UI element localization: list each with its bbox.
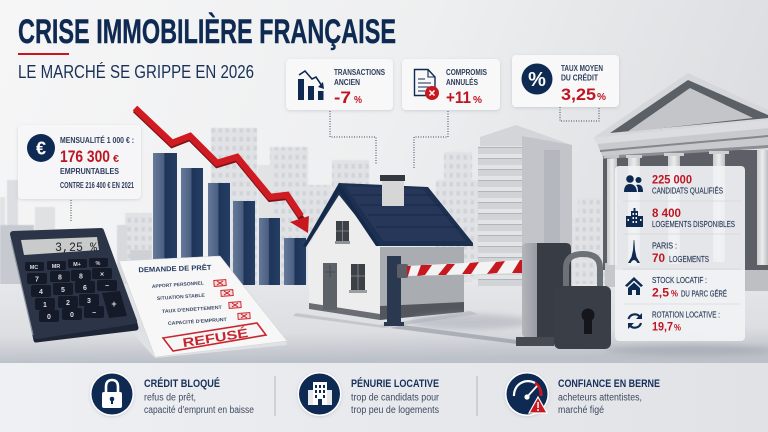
takeaway: confidence [505,372,660,416]
checklist rows [152,280,227,327]
icon: euro: € [36,138,46,158]
panel: transactions: % [354,94,363,106]
stat: available housing [626,208,735,229]
icon: percent: % [528,69,546,91]
rejected checkboxes [214,280,250,319]
panel: transactions: ANCIEN [334,78,360,87]
stat: candidates: CANDIDATS QUALIFIÉS [652,186,723,196]
refused stamp [163,323,266,351]
takeaway: rental shortage: trop peu de logements [351,405,439,416]
takeaway: confidence: CONFIANCE EN BERNE [558,378,660,390]
panel: average rate: 3,25 [561,85,596,104]
panel: transactions [286,59,393,110]
icon: building badge [298,372,342,416]
bottom band [0,363,768,432]
stat: candidates [624,174,723,196]
stat: rental stock: STOCK LOCATIF : [652,276,707,285]
barrier [384,243,768,355]
stat: candidates: 225 000 [652,174,692,186]
panel: borrowing capacity: MENSUALITÉ 1 000 € : [60,136,134,145]
calculator keys [25,258,127,322]
stat: rental turnover [628,310,720,334]
panel: borrowing capacity: € [113,154,119,165]
calculator keys: × [100,272,104,278]
takeaway: blocked credit: refus de prêt, [144,392,196,404]
bank building with columns [593,73,768,291]
panel: cancelled agreements: ANNULÉS [446,78,479,87]
calculator keys: 1 [43,302,47,309]
loan application document [119,256,287,358]
checklist rows: TAUX D'ENDETTEMENT [162,305,222,315]
calculator keys: 8 [79,274,83,280]
panel: average rate: % [597,91,607,103]
stat: rental stock: % [671,288,678,298]
icon: cancelled document [414,70,439,100]
pale city skyline [0,128,608,288]
calculator keys: 2 [66,300,70,307]
calculator keys: M+ [73,262,81,268]
icon: gauge with warning [505,372,549,416]
calculator keys: 8 [58,274,62,282]
ground plane [0,284,768,363]
dotted connectors [71,107,599,222]
calculator keys: − [92,310,96,317]
panel: transactions: TRANSACTIONS [334,68,386,77]
stat: Paris: LOGEMENTS [669,255,709,264]
panel: transactions: -7 [334,88,351,107]
icon: lock badge [90,372,134,416]
takeaway: blocked credit: capacité d'emprunt en baisse [144,405,254,416]
falling red arrow [135,108,309,233]
calculator keys: 5 [61,287,65,294]
checklist rows: CAPACITÉ D'EMPRUNT [168,315,227,327]
title: CRISE IMMOBILIÈRE FRANÇAISE [18,13,396,51]
stat: rental stock: 2,5 [652,286,669,300]
calculator keys: 4 [39,289,43,296]
icon: falling bars [298,71,324,100]
icon: rotate arrows [628,313,642,329]
bar chart [153,153,306,285]
calculator keys: 7 [35,276,39,284]
padlock [554,254,611,349]
panel: borrowing capacity: CONTRE 216 400 € EN 2021 [60,181,134,190]
calculator display: 3,25 % [55,240,97,255]
checklist rows: SITUATION STABLE [157,293,206,302]
stat: Paris: PARIS : [652,242,677,250]
stat: Paris: 70 [652,251,665,265]
takeaway: confidence: acheteurs attentistes, [558,392,642,404]
panel: average rate [512,55,619,107]
panel: cancelled agreements: +11 [446,88,471,107]
title accent rule [18,53,69,55]
stat: rental turnover: % [674,322,681,332]
calculator keys: % [96,261,101,267]
calculator keys: 6 [83,285,87,292]
document heading: DEMANDE DE PRÊT [138,263,212,274]
stat: Paris [628,240,709,265]
takeaway: rental shortage: trop de candidats pour [351,392,440,404]
icon: house [625,277,643,295]
calculator keys: 0 [47,314,51,321]
stat: available housing: LOGEMENTS DISPONIBLES [652,220,735,229]
calculator [11,231,136,340]
stat: rental turnover: ROTATION LOCATIVE : [652,310,720,320]
stat: rental stock: DU PARC GÉRÉ [681,290,727,298]
icon: Eiffel tower [628,240,640,263]
panel: rental market [615,166,745,341]
panel: borrowing capacity [18,125,141,199]
panel: cancelled agreements: COMPROMIS [446,68,488,77]
stat: rental turnover: 19,7 [652,320,673,334]
panel: average rate: TAUX MOYEN [561,64,603,73]
calculator keys: 0 [70,312,74,319]
takeaway: rental shortage [298,372,440,416]
panel: average rate: DU CRÉDIT [561,74,598,82]
panel: cancelled agreements: % [473,94,483,106]
calculator keys: 3 [87,298,91,305]
calculator keys: MR [52,264,60,270]
panel: borrowing capacity: 176 300 [60,148,110,166]
panel: borrowing capacity: EMPRUNTABLES [60,167,120,176]
tall apartment building [478,125,572,287]
house [293,175,478,328]
stat: rental stock [625,276,727,300]
subtitle: LE MARCHÉ SE GRIPPE EN 2026 [18,61,254,82]
panel: cancelled agreements [402,59,500,110]
takeaway: confidence: marché figé [558,405,604,416]
refused stamp: REFUSÉ [182,325,249,350]
checklist rows: APPORT PERSONNEL [152,280,204,290]
takeaway: blocked credit [90,372,254,416]
calculator keys: + [111,299,117,309]
stat: available housing: 8 400 [652,208,681,220]
takeaway: rental shortage: PÉNURIE LOCATIVE [351,377,439,390]
calculator keys: MC [30,265,38,271]
takeaway: blocked credit: CRÉDIT BLOQUÉ [144,377,220,390]
calculator keys: − [105,283,109,290]
